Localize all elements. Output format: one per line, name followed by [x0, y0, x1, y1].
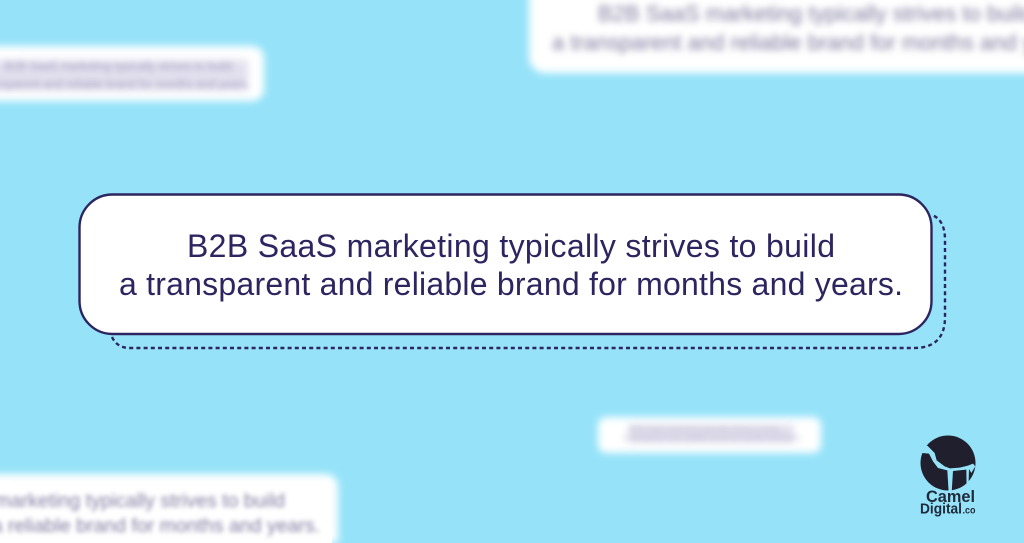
blurred card: bottom left [0, 474, 338, 543]
blurred card: lower middle: B2B SaaS marketing typically strives to build [630, 424, 778, 433]
logo wordmark: Camel [926, 487, 975, 506]
blurred card: bottom left: a reliable brand for months and years. [0, 515, 320, 537]
logo icon: camel in circle [920, 436, 976, 492]
main quote card [80, 194, 932, 334]
blurred card: lower middle: a transparent and reliable brand for months and years. [622, 433, 803, 442]
quote text line 2: a transparent and reliable brand for months and years. [119, 266, 903, 302]
dotted offset outline [112, 215, 945, 348]
blurred card: top right: B2B SaaS marketing typically strives to build [598, 1, 1024, 26]
blurred card: lower middle [598, 417, 821, 453]
quote text line 1: B2B SaaS marketing typically strives to build [187, 228, 835, 264]
logo: Camel Digital: .co [962, 506, 976, 516]
blurred card: top left [0, 46, 264, 101]
blurred card: top right [529, 0, 1024, 73]
blurred card: top left: B2B SaaS marketing typically strives to build [4, 61, 232, 73]
logo: Camel Digital [920, 436, 976, 518]
logo: Camel Digital: Digital [920, 500, 962, 518]
blurred card: bottom left: marketing typically strives to build [0, 490, 285, 512]
